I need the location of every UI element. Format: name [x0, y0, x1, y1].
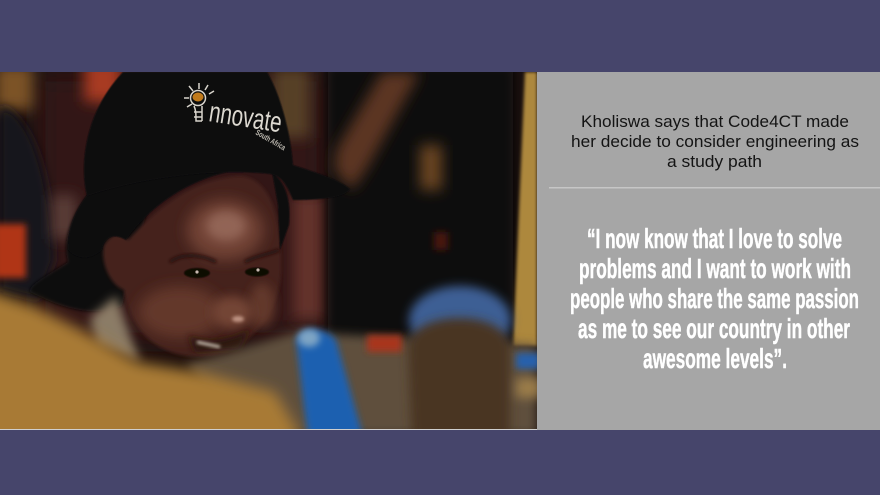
intro text [571, 112, 859, 171]
cap logo: Innovate South Africa: South Africa [254, 128, 287, 152]
blurred background figures [0, 60, 513, 351]
collar [90, 296, 140, 362]
pull quote: awesome levels”. [643, 343, 787, 374]
intro text: Kholiswa says that Code4CT made [581, 112, 849, 131]
tan foreground blur [0, 284, 308, 429]
intro text: her decide to consider engineering as [571, 132, 859, 151]
black cap [84, 72, 350, 200]
cap logo: Innovate South Africa: nnovate [207, 96, 284, 139]
photo: girl in Innovate cap [0, 60, 540, 450]
hair braids [30, 195, 150, 311]
face [103, 176, 281, 357]
blue bottle [296, 330, 364, 440]
pull quote [570, 223, 859, 374]
panel: quote [537, 72, 880, 430]
photo bottom edge line [0, 429, 537, 430]
blue and brown microphone [408, 286, 511, 445]
cap logo: Innovate South Africa [184, 83, 287, 152]
hair fringe under cap [68, 172, 228, 258]
side braid [272, 172, 290, 250]
blue patch at right [516, 353, 540, 369]
infographic canvas [0, 72, 880, 430]
red object [367, 335, 402, 352]
eyes, nose and smile [170, 250, 279, 352]
tan post at right edge [513, 72, 537, 346]
blurred foreground laptop [186, 332, 537, 435]
intro text: a study path [667, 152, 762, 171]
